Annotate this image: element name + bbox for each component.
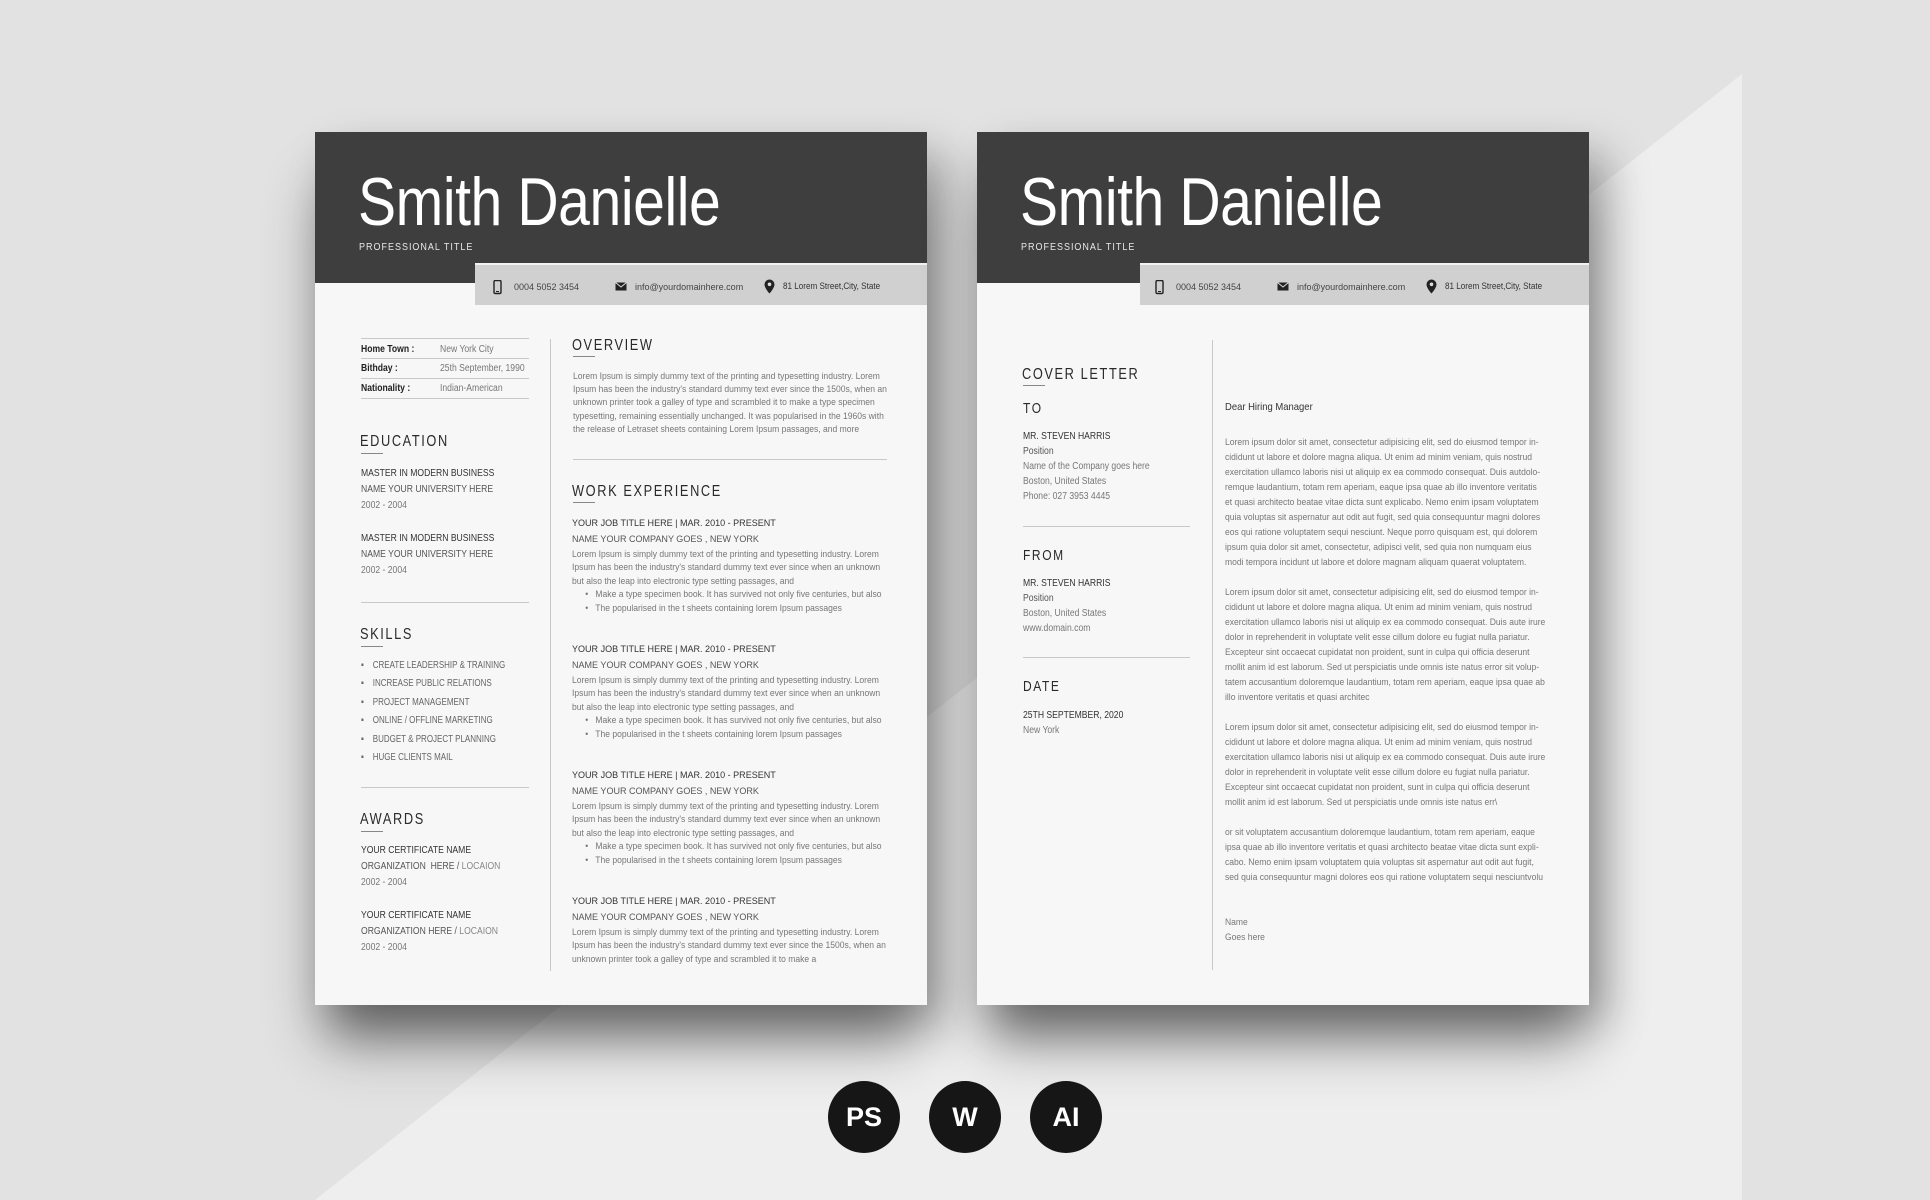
personal info table: Home Town : xyxy=(361,344,414,355)
heading: cover letter: COVER LETTER xyxy=(1022,366,1139,383)
letter body: Excepteur sint occaecat cupidatat non proident, sunt in culpa qui officia deserunt xyxy=(1225,782,1530,792)
job 4 xyxy=(572,896,886,964)
recipient details: Boston, United States xyxy=(1023,476,1106,487)
heading: skills: SKILLS xyxy=(360,626,413,643)
letter body: sed quia consequuntur magni dolores eos qui ratione voluptatem sequi nesciuntvolu xyxy=(1225,872,1543,882)
letter body xyxy=(1225,437,1545,882)
sender details: Position xyxy=(1023,593,1054,604)
job 1: but also the leap into electronic type setting passages, and xyxy=(572,576,794,586)
personal info table xyxy=(361,338,529,399)
letter body: illo inventore veritatis et quasi architec xyxy=(1225,692,1369,702)
page: cover letter xyxy=(977,132,1589,1005)
awards entries: YOUR CERTIFICATE NAME xyxy=(361,845,471,856)
recipient details: MR. STEVEN HARRIS xyxy=(1023,431,1110,442)
job 3: YOUR JOB TITLE HERE | MAR. 2010 - PRESENT xyxy=(572,770,776,781)
contact email: info@yourdomainhere.com xyxy=(1297,282,1405,292)
contact bar xyxy=(1140,263,1589,305)
awards entries: YOUR CERTIFICATE NAME xyxy=(361,910,471,921)
job 3: Ipsum has been the industry's standard dummy text ever since when an unknown xyxy=(572,814,880,824)
letter body: ipsum quia dolor sit amet, consectetur, adipisci velit, sed quia non numquam eius xyxy=(1225,542,1532,552)
icon: AI badge xyxy=(1030,1081,1102,1153)
heading: work experience: WORK EXPERIENCE xyxy=(572,483,722,500)
job 2: YOUR JOB TITLE HERE | MAR. 2010 - PRESENT xyxy=(572,644,776,655)
letter body: Lorem ipsum dolor sit amet, consectetur adipisicing elit, sed do eiusmod tempor in- xyxy=(1225,587,1539,597)
job 1: • The popularised in the t sheets containing lorem Ipsum passages xyxy=(585,603,842,613)
contact address: 81 Lorem Street,City, State xyxy=(1445,281,1542,291)
overview text: Ipsum has been the industry's standard dummy text ever since the 1500s, when an xyxy=(573,384,887,394)
overview text: Lorem Ipsum is simply dummy text of the printing and typesetting industry. Lorem xyxy=(573,371,880,381)
heading: from: FROM xyxy=(1023,547,1065,564)
job 2: • The popularised in the t sheets containing lorem Ipsum passages xyxy=(585,729,842,739)
job 4: Ipsum has been the industry's standard dummy text ever since the 1500s, when an xyxy=(572,940,886,950)
personal info table: 25th September, 1990 xyxy=(440,363,525,374)
signature: Goes here xyxy=(1225,932,1265,942)
icon: pin xyxy=(1426,280,1436,294)
icon: PS badge: PS xyxy=(846,1102,882,1132)
personal info table: Nationality : xyxy=(361,383,410,394)
letter body: remque laudantium, totam rem aperiam, eaque ipsa quae ab illo inventore veritatis xyxy=(1225,482,1537,492)
skills list: ▪ BUDGET & PROJECT PLANNING xyxy=(361,734,496,745)
awards entries: ORGANIZATION HERE / LOCAION xyxy=(361,926,498,937)
letter body: cididunt ut labore et dolore magna aliqua. Ut enim ad minim veniam, quis nostrud xyxy=(1225,737,1532,747)
letter body: eos qui ratione voluptatem sequi nesciunt. Neque porro quisquam est, qui dolorem xyxy=(1225,527,1537,537)
date details xyxy=(1023,710,1124,736)
heading: education: EDUCATION xyxy=(360,433,449,450)
job 4: YOUR JOB TITLE HERE | MAR. 2010 - PRESENT xyxy=(572,896,776,907)
icon: phone xyxy=(493,280,502,294)
job 3: • Make a type specimen book. It has survived not only five centuries, but also xyxy=(585,841,882,851)
skills list: ▪ HUGE CLIENTS MAIL xyxy=(361,752,453,763)
job 3 xyxy=(572,770,882,865)
sender details xyxy=(1023,578,1110,634)
job 2: Ipsum has been the industry's standard dummy text ever since when an unknown xyxy=(572,688,880,698)
awards entries xyxy=(361,845,500,953)
personal info table: Indian-American xyxy=(440,383,503,394)
job 2: Lorem Ipsum is simply dummy text of the printing and typesetting industry. Lorem xyxy=(572,675,879,685)
letter body: cididunt ut labore et dolore magna aliqua. Ut enim ad minim veniam, quis nostrud xyxy=(1225,452,1532,462)
page: resume xyxy=(315,132,927,1005)
heading: overview: OVERVIEW xyxy=(572,337,654,354)
job 4: Lorem Ipsum is simply dummy text of the printing and typesetting industry. Lorem xyxy=(572,927,879,937)
sender details: Boston, United States xyxy=(1023,608,1106,619)
awards entries: 2002 - 2004 xyxy=(361,942,407,953)
letter body: mollit anim id est laborum. Sed ut perspiciatis unde omnis iste natus err\ xyxy=(1225,797,1497,807)
professional title: PROFESSIONAL TITLE xyxy=(1021,242,1135,253)
icon: AI badge: AI xyxy=(1052,1102,1080,1132)
job 1: NAME YOUR COMPANY GOES , NEW YORK xyxy=(572,534,759,545)
letter body: cididunt ut labore et dolore magna aliqua. Ut enim ad minim veniam, quis nostrud xyxy=(1225,602,1532,612)
letter body: tatem accusantium doloremque laudantium, totam rem aperiam, eaque ipsa quae ab xyxy=(1225,677,1545,687)
date details: 25TH SEPTEMBER, 2020 xyxy=(1023,710,1123,721)
job 3: • The popularised in the t sheets containing lorem Ipsum passages xyxy=(585,855,842,865)
job 1 xyxy=(572,518,882,613)
overview text xyxy=(573,371,887,434)
letter body: modi tempora incidunt ut labore et dolore magnam aliquam quaerat voluptatem. xyxy=(1225,557,1526,567)
recipient details: Position xyxy=(1023,446,1054,457)
letter body: Lorem ipsum dolor sit amet, consectetur adipisicing elit, sed do eiusmod tempor in- xyxy=(1225,437,1539,447)
recipient details: Phone: 027 3953 4445 xyxy=(1023,491,1110,502)
letter body: mollit anim id est laborum. Sed ut perspiciatis unde omnis iste natus error sit volup- xyxy=(1225,662,1539,672)
icon: PS badge xyxy=(828,1081,900,1153)
job 4: NAME YOUR COMPANY GOES , NEW YORK xyxy=(572,912,759,923)
letter body: Lorem ipsum dolor sit amet, consectetur adipisicing elit, sed do eiusmod tempor in- xyxy=(1225,722,1539,732)
skills list: ▪ PROJECT MANAGEMENT xyxy=(361,697,469,708)
icon: pin xyxy=(764,280,774,294)
education entries: NAME YOUR UNIVERSITY HERE xyxy=(361,549,493,560)
salutation: Dear Hiring Manager xyxy=(1225,401,1313,413)
job 1: YOUR JOB TITLE HERE | MAR. 2010 - PRESENT xyxy=(572,518,776,529)
signature xyxy=(1225,917,1265,942)
job 2: NAME YOUR COMPANY GOES , NEW YORK xyxy=(572,660,759,671)
job 1: • Make a type specimen book. It has survived not only five centuries, but also xyxy=(585,589,882,599)
job 4: unknown printer took a galley of type and scrambled it to make a xyxy=(572,954,816,964)
skills list: ▪ ONLINE / OFFLINE MARKETING xyxy=(361,715,493,726)
letter body: dolor in reprehenderit in voluptate velit esse cillum dolore eu fugiat nulla pariatur. xyxy=(1225,632,1530,642)
job 2 xyxy=(572,644,882,739)
job 1: Ipsum has been the industry's standard dummy text ever since when an unknown xyxy=(572,562,880,572)
overview text: typesetting, remaining essentially unchanged. It was popularised in the 1960s with xyxy=(573,411,884,421)
signature: Name xyxy=(1225,917,1248,927)
letter body: et quasi architecto beatae vitae dicta sunt explicabo. Nemo enim ipsam voluptatem xyxy=(1225,497,1539,507)
job 3: but also the leap into electronic type setting passages, and xyxy=(572,828,794,838)
icon: mail xyxy=(1278,282,1288,290)
job 2: • Make a type specimen book. It has survived not only five centuries, but also xyxy=(585,715,882,725)
education entries: 2002 - 2004 xyxy=(361,500,407,511)
overview text: the release of Letraset sheets containing Lorem Ipsum passages, and more xyxy=(573,424,859,434)
contact phone: 0004 5052 3454 xyxy=(514,282,579,292)
name: Smith Danielle xyxy=(1020,164,1382,240)
date details: New York xyxy=(1023,725,1059,736)
name: Smith Danielle xyxy=(358,164,720,240)
letter body: dolor in reprehenderit in voluptate velit esse cillum dolore eu fugiat nulla pariatur. xyxy=(1225,767,1530,777)
letter body: Excepteur sint occaecat cupidatat non proident, sunt in culpa qui officia deserunt xyxy=(1225,647,1530,657)
contact email: info@yourdomainhere.com xyxy=(635,282,743,292)
professional title: PROFESSIONAL TITLE xyxy=(359,242,473,253)
letter body: exercitation ullamco laboris nisi ut aliquip ex ea commodo consequat. Duis aute irure xyxy=(1225,617,1545,627)
education entries: NAME YOUR UNIVERSITY HERE xyxy=(361,484,493,495)
header band xyxy=(315,132,927,283)
job 1: Lorem Ipsum is simply dummy text of the printing and typesetting industry. Lorem xyxy=(572,549,879,559)
education entries xyxy=(361,468,494,576)
job 3: Lorem Ipsum is simply dummy text of the printing and typesetting industry. Lorem xyxy=(572,801,879,811)
letter body: ipsa quae ab illo inventore veritatis et quasi architecto beatae vitae dicta sunt expli- xyxy=(1225,842,1539,852)
education entries: 2002 - 2004 xyxy=(361,565,407,576)
letter body: exercitation ullamco laboris nisi ut aliquip ex ea commodo consequat. Duis aute irure xyxy=(1225,752,1545,762)
recipient details xyxy=(1023,431,1150,502)
awards entries: 2002 - 2004 xyxy=(361,877,407,888)
education entries: MASTER IN MODERN BUSINESS xyxy=(361,533,494,544)
contact bar xyxy=(475,263,927,305)
job 3: NAME YOUR COMPANY GOES , NEW YORK xyxy=(572,786,759,797)
recipient details: Name of the Company goes here xyxy=(1023,461,1150,472)
icon: W badge: W xyxy=(952,1102,978,1132)
letter body: exercitation ullamco laboris nisi ut aliquip ex ea commodo consequat. Duis autdolo- xyxy=(1225,467,1540,477)
contact address: 81 Lorem Street,City, State xyxy=(783,281,880,291)
heading: to: TO xyxy=(1023,400,1043,417)
icon: W badge xyxy=(929,1081,1001,1153)
awards entries: ORGANIZATION HERE / LOCAION xyxy=(361,861,500,872)
personal info table: Bithday : xyxy=(361,363,398,374)
icon: mail xyxy=(616,282,626,290)
skills list: ▪ CREATE LEADERSHIP & TRAINING xyxy=(361,660,505,671)
overview text: unknown printer took a galley of type and scrambled it to make a type specimen xyxy=(573,397,875,407)
sender details: MR. STEVEN HARRIS xyxy=(1023,578,1110,589)
letter body: quia voluptas sit aspernatur aut odit aut fugit, sed quia consequuntur magni dolores xyxy=(1225,512,1540,522)
contact phone: 0004 5052 3454 xyxy=(1176,282,1241,292)
sender details: www.domain.com xyxy=(1023,623,1090,634)
icon: phone xyxy=(1155,280,1164,294)
job 2: but also the leap into electronic type setting passages, and xyxy=(572,702,794,712)
skills list xyxy=(361,660,505,763)
letter body: cabo. Nemo enim ipsam voluptatem quia voluptas sit aspernatur aut odit aut fugit, xyxy=(1225,857,1534,867)
header band xyxy=(977,132,1589,283)
heading: date: DATE xyxy=(1023,678,1061,695)
personal info table: New York City xyxy=(440,344,494,355)
heading: awards: AWARDS xyxy=(360,811,425,828)
education entries: MASTER IN MODERN BUSINESS xyxy=(361,468,494,479)
skills list: ▪ INCREASE PUBLIC RELATIONS xyxy=(361,678,492,689)
letter body: or sit voluptatem accusantium doloremque laudantium, totam rem aperiam, eaque xyxy=(1225,827,1535,837)
